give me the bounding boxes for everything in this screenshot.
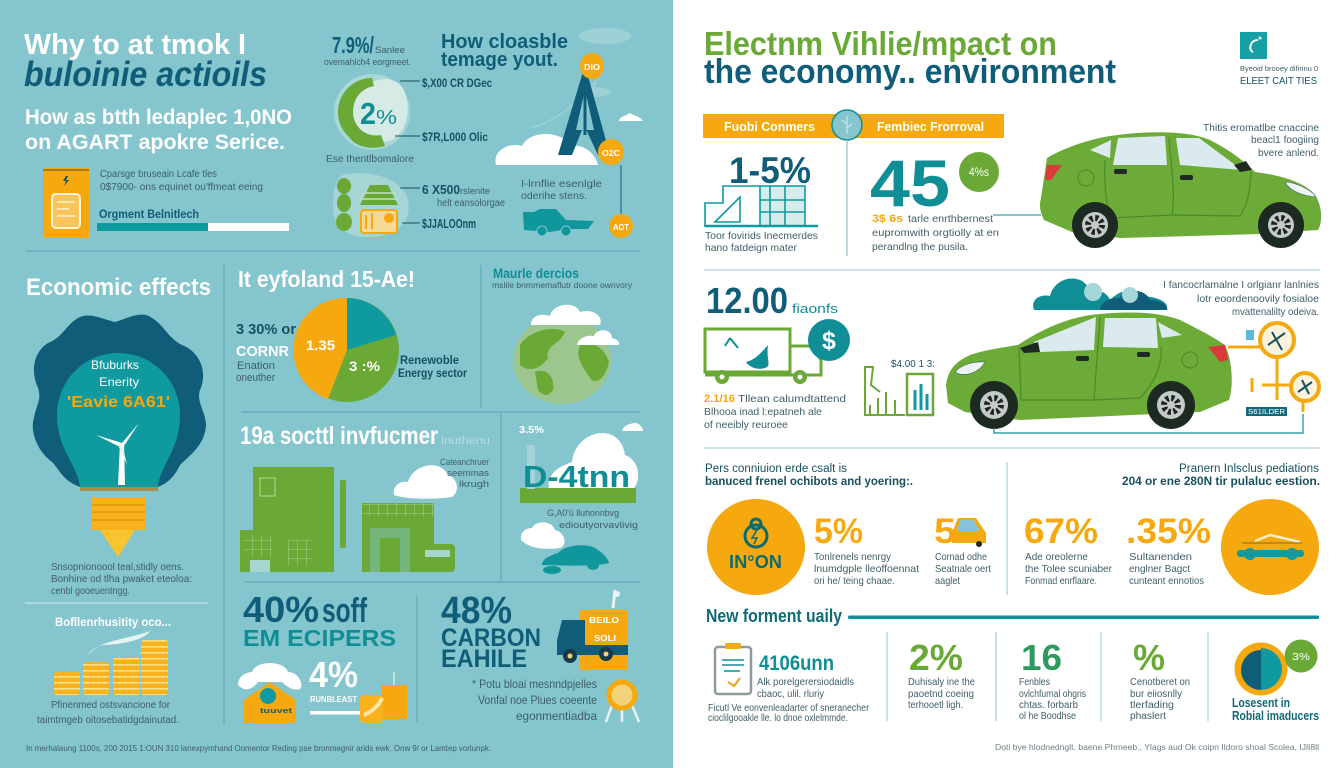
banner: orange header: Fuobi Conmers: [724, 119, 815, 134]
text block: losesent: [1232, 696, 1319, 723]
text and car: teal vehicle: oderihe stens.: [521, 190, 587, 202]
footnote: right: Doti bye hlodnednglt. baene Phrneeb., Ylags aud Ok coipn Ildoro shoal Scolea, IJlI8ll: [995, 742, 1319, 752]
icon: orange markers: O2C: [602, 149, 620, 158]
stat: 4106: cbaoc, ulil. rluriy: [757, 689, 824, 700]
icon: half circle with green badge: [1234, 640, 1318, 696]
icon: delivery truck and dollar: $: [822, 327, 836, 355]
subtitle: left: on AGART apokre Serice.: [25, 131, 285, 154]
text block: bottom left intro: [705, 463, 913, 488]
text block: carbon note: * Potu bloai mesnndpjelles: [472, 677, 597, 691]
stat: 12.00: fiaonfs: [792, 301, 839, 316]
text block: bottom right intro: [1122, 463, 1320, 488]
stat: 45 with badge: perandlng the pusila.: [872, 241, 968, 253]
icon: orange markers: DIO: [584, 63, 600, 72]
text and car: teal vehicle: [521, 178, 602, 236]
icon: orange cans: [360, 672, 407, 723]
text block: truck note: of neeibly reuroee: [704, 419, 788, 431]
stat: 5 with car: aaglet: [935, 575, 960, 587]
icon: orange document: [43, 168, 89, 238]
text block: car note top: bvere anlend.: [1258, 147, 1319, 159]
text block: car note middle: mvattenalilty odeiva.: [1232, 306, 1319, 318]
stat: 4106: Ficutl Ve eonvenleadarter of sneranecher: [708, 703, 870, 714]
title: left heading: [24, 29, 267, 94]
stat: 5 percent: Tonlrenels nenrgy: [814, 551, 892, 563]
pie right labels: [398, 353, 467, 380]
progress bar: [97, 223, 289, 231]
text block: truck note: Blhooa inad l:epatneh ale: [704, 406, 822, 418]
subtitle: left: [25, 106, 292, 154]
stat: 5 percent: [814, 512, 919, 587]
icon: delivery truck and dollar: [705, 319, 850, 384]
stat: 2 percent: 2%: [909, 637, 963, 678]
icon: truck: [557, 590, 628, 670]
text block: coins caption: taimtmgeb oitosebatidgdainutad.: [37, 714, 179, 726]
title: right heading: [704, 25, 1116, 91]
stat: 16: 16: [1021, 637, 1062, 678]
cluster labels: $JJALOOnm: [422, 217, 476, 231]
stat: percent: %: [1133, 637, 1165, 678]
illustration: cloud with caption: seemmas: [447, 468, 490, 478]
icon: half circle with green badge: 3%: [1292, 652, 1310, 663]
logo: Byeoid brooey difinnu 0: [1240, 64, 1318, 73]
text block: car note top: Thitis eromatlbe cnaccine: [1203, 122, 1319, 134]
stat: percent: tlerfading: [1130, 700, 1174, 711]
text block: carbon note: Vonfal noe Plues coeente: [478, 693, 597, 707]
donut labels: $7R,L000 Olic: [422, 130, 488, 144]
icon: orange keyhole circle: [707, 499, 805, 595]
stat: seven percent: ovemahlch4 eorgmeet.: [324, 57, 411, 67]
text block: bulb caption: Bonhine od tlha pwaket eteoloa:: [51, 573, 192, 585]
text and car: teal vehicle: I-lrnflie esenlgle: [521, 178, 602, 190]
title: right heading: the economy.. environment: [704, 53, 1116, 91]
icon: orange markers: [580, 53, 633, 238]
text block: losesent: Losesent in: [1232, 696, 1290, 710]
illustration: cloud city with label: G,A0'ü lluhonnbvg: [547, 508, 619, 519]
text block: globe heading: mslile bnmmemaflutr doone ownvory: [492, 280, 633, 290]
illustration: green buildings: [240, 467, 455, 572]
cluster labels: rslenite: [460, 186, 490, 196]
icon: coin stacks: [54, 631, 168, 695]
stat: 35 percent: Sultanenden: [1129, 551, 1192, 563]
stat: 1-5 percent with building: Toor fovirids Inecmerdes: [705, 230, 818, 242]
diagram: energy connectors: [994, 323, 1319, 433]
stat: 2 percent: [908, 637, 975, 711]
icon: orange ring: [606, 682, 639, 722]
stat: 45 with badge: 45: [870, 146, 950, 220]
text block: bulb caption: Snsopnionoool teal,stidly oens.: [51, 561, 184, 573]
title: right heading: Electnm Vihlie/mpact on: [704, 25, 1057, 62]
illustration: cloud city with label: edioutyorvavlivig: [559, 520, 638, 531]
stat: percent: [1130, 637, 1190, 722]
stat: 5 with car: [934, 512, 991, 587]
text block: car note top: beacl1 foogiing: [1251, 134, 1319, 146]
stat: seven percent: Sanlee: [375, 45, 405, 55]
diagram: energy connectors: S61ILDER: [1248, 409, 1285, 416]
heading: how cloasble: How cloasble: [441, 31, 568, 53]
stat: 35 percent: cunteant ennotios: [1129, 575, 1204, 587]
illustration: cloud with caption: Cateanchruer: [440, 457, 489, 467]
text block: progress note: 0$7900- ons equinet ou'ffmeat eeing: [100, 182, 263, 193]
illustration: light bulb: Enerity: [99, 375, 139, 389]
text block: globe heading: [492, 266, 633, 290]
pie chart: 1.35: [306, 337, 335, 353]
text block: truck note: Tllean calumdtattend: [738, 393, 846, 405]
stat: 1-5 percent with building: hano fatdeign mater: [705, 242, 797, 254]
stat: forty percent: EM ECIPERS: [243, 625, 396, 651]
text block: progress note: Orgment Belnitlech: [99, 207, 199, 221]
donut labels: $,X00 CR DGec: [422, 76, 492, 90]
text block: bottom right intro: Pranern Inlsclus pediations: [1179, 463, 1319, 475]
donut chart: 2: [360, 96, 376, 131]
stat: 5 percent: 5%: [814, 512, 863, 551]
stat: 67 percent: Ade oreolerne: [1025, 551, 1088, 563]
illustration: globe with clouds: [513, 305, 619, 404]
stat: percent: phaslert: [1130, 711, 1166, 722]
title: left heading: Why to at tmok I: [24, 29, 246, 61]
stat: carbon: 48%: [441, 590, 512, 632]
stat: 5 with car: 5: [934, 512, 956, 551]
pie chart: [293, 298, 399, 402]
stat: 12.00: 12.00: [706, 280, 788, 321]
text block: bulb caption: cenbl gooeuentngg.: [51, 585, 130, 597]
icon: green and orange cluster: [333, 173, 409, 237]
heading: new forment: New forment uaily: [706, 606, 842, 626]
mini bar chart: $4.00 1 3:: [891, 358, 935, 370]
donut chart: %: [376, 107, 397, 129]
panel: right background: [674, 0, 1344, 768]
stat: forty percent: 40%: [243, 589, 319, 630]
stat: 45 with badge: 3$ 6s: [872, 213, 903, 225]
pie left labels: 3 30% or: [236, 321, 296, 338]
pie left labels: [236, 321, 296, 384]
pie left labels: CORNR: [236, 343, 289, 360]
illustration: light bulb: Bfuburks: [91, 358, 139, 372]
illustration: cloud city with label: D-4tnn: [523, 459, 630, 494]
icon: house with cloud: tuuvet: [260, 708, 293, 715]
text block: bulb caption: [51, 561, 192, 597]
donut labels: [326, 76, 492, 165]
donut chart: [334, 74, 410, 150]
stat: 1-5 percent with building: 1-5%: [729, 150, 811, 191]
text block: car note middle: [1163, 279, 1319, 318]
stat: four percent: 4%: [309, 654, 358, 695]
stat: 2 percent: paoetnd coeing: [908, 689, 974, 700]
stat: forty percent: soff: [322, 592, 367, 630]
text block: bottom right intro: 204 or ene 280N tir pulaluc eestion.: [1122, 476, 1320, 488]
stat: 5 with car: Seatnale oert: [935, 563, 991, 575]
logo: [1240, 32, 1318, 87]
stat: 4106: 4106unn: [759, 652, 834, 675]
stat: carbon: [441, 590, 541, 673]
pie right labels: Renewoble: [400, 353, 459, 367]
illustration: cloud and teal car: [521, 522, 609, 574]
stat: 35 percent: englner Bagct: [1129, 563, 1190, 575]
text block: globe heading: Maurle dercios: [493, 266, 579, 281]
pie left labels: oneuther: [236, 372, 275, 384]
icon: truck: BEILO: [589, 616, 619, 625]
heading: social influence: 19a socttl invfucmer: [240, 422, 438, 450]
illustration: light bulb: [33, 315, 206, 557]
heading: social influence: lnuthenu: [441, 435, 490, 447]
text block: coins caption: Pfinenmed ostsvancione for: [51, 699, 170, 711]
text block: carbon note: [472, 677, 597, 723]
illustration: green car facing right: [1040, 132, 1321, 248]
text block: losesent: Robial imaducers: [1232, 709, 1319, 723]
illustration: cloud with caption: [394, 457, 490, 499]
stat: 12.00: [706, 280, 839, 321]
text block: progress note: [99, 169, 263, 221]
heading: new forment: [706, 606, 1319, 626]
icon: clipboard: [715, 643, 751, 694]
mini bar chart: [865, 358, 935, 416]
icon: orange circle with teal vehicle: [1221, 499, 1319, 595]
stat: percent: Cenotberet on: [1130, 677, 1190, 688]
text block: carbon note: egonmentiadba: [516, 709, 597, 723]
stat: 45 with badge: eupromwith orgtiolly at en: [872, 227, 999, 239]
stat: seven percent: 7.9%/: [332, 32, 374, 58]
text block: car note middle: I fancocrlamalne I orlgianr lanlnies: [1163, 279, 1319, 291]
stat: forty percent: [243, 589, 396, 651]
stat: 35 percent: .35%: [1126, 512, 1211, 551]
stat: 16: [1019, 637, 1086, 722]
footnote: left: In merhalaung 1100s, 200 2015 1:OUN 310 lanexpymhand Oomentor Reding pse bronmegnir arids ewk. Onw 9/ or Lamtep vorlunpk.: [26, 743, 491, 753]
cluster labels: 6 X500: [422, 183, 460, 197]
stat: 2 percent: Duhisaly ine the: [908, 677, 975, 688]
donut labels: Ese thentlbomalore: [326, 154, 414, 165]
stat: 45 with badge: tarle enrthbernest: [908, 213, 993, 225]
stat: 67 percent: 67%: [1024, 512, 1098, 551]
stat: seven percent: [324, 32, 411, 67]
illustration: cloud city with label: 3.5%: [519, 425, 544, 436]
stat: 16: chtas. forbarb: [1019, 700, 1078, 711]
stat: 67 percent: the Tolee scuniaber: [1025, 563, 1112, 575]
text block: bottom left intro: banuced frenel ochibots and yoering:.: [705, 476, 913, 488]
text block: car note middle: lotr eoordenoovily fosialoe: [1197, 293, 1319, 305]
heading: coins: Bofllenrhusitity oco...: [55, 617, 171, 629]
heading: economic effects: Economic effects: [26, 274, 211, 301]
illustration: cloud city with label: [519, 423, 643, 531]
stat: 1-5 percent with building: [705, 150, 818, 254]
pie chart: 3 :%: [349, 358, 381, 374]
cluster labels: [400, 183, 505, 231]
text block: progress note: Cparsge bruseain Lcafe tles: [100, 169, 217, 180]
text block: car note top: [1203, 122, 1319, 159]
illustration: light bulb: 'Eavie 6A61': [67, 394, 170, 411]
banner: orange header: Fembiec Frorroval: [877, 119, 984, 134]
illustration: clouds and tower: [495, 28, 643, 215]
stat: carbon: EAHILE: [441, 645, 527, 673]
stat: 4106: cioclilgooakle lle. lo dnoe oxlelmmde.: [708, 713, 848, 724]
stat: 5 percent: ori he/ teing chaae.: [814, 575, 895, 587]
stat: 45 with badge: 4%s: [969, 165, 989, 179]
stat: 35 percent: [1126, 512, 1211, 587]
stat: 67 percent: [1024, 512, 1112, 587]
logo: ELEET CAIT TIES: [1240, 75, 1317, 87]
stat: four percent: RUNBLEAST: [310, 695, 357, 704]
icon: orange keyhole circle: IN°ON: [729, 552, 782, 572]
icon: teal clouds: [1033, 279, 1167, 310]
heading: pie section: It eyfoland 15-Ae!: [238, 266, 415, 292]
stat: 4106: Alk porelgerersiodaidls: [757, 677, 854, 688]
stat: 45 with badge: [870, 146, 1041, 253]
pie left labels: Enation: [237, 360, 275, 372]
banner: orange header: [703, 110, 1004, 140]
stat: 2 percent: terhooetl ligh.: [908, 700, 963, 711]
title: left heading: buloinie actioils: [24, 55, 267, 94]
stat: 5 percent: lnumdgple lleoffoennat: [814, 563, 919, 575]
icon: truck: SOLI: [594, 634, 616, 643]
stat: 16: Fenbles: [1019, 677, 1050, 688]
cluster labels: helt eansolorgae: [437, 198, 505, 209]
stat: 16: ovlchfurnal ohgris: [1019, 689, 1086, 700]
stat: carbon: CARBON: [441, 624, 541, 652]
icon: orange markers: AOT: [613, 223, 629, 232]
icon: house with cloud: [238, 663, 301, 723]
stat: 67 percent: Fonmad enrflaare.: [1025, 575, 1097, 587]
stat: 5 with car: Cornad odhe: [935, 551, 987, 563]
heading: how cloasble: [441, 31, 568, 71]
text block: bottom left intro: Pers conniuion erde csalt is: [705, 463, 847, 475]
text block: truck note: [704, 393, 846, 431]
heading: how cloasble: temage yout.: [441, 49, 558, 71]
panel: left background: [0, 0, 673, 768]
illustration: green car facing left: [946, 312, 1232, 429]
stat: percent: bur eiiosnlly: [1130, 689, 1182, 700]
illustration: cloud with caption: lkrugh: [459, 479, 489, 489]
stat: 16: ol he Boodhse: [1019, 711, 1076, 722]
text block: coins caption: [37, 699, 179, 726]
pie right labels: Energy sector: [398, 366, 467, 380]
stat: 4106: [708, 652, 870, 724]
text block: truck note: 2.1/16: [704, 393, 735, 405]
stat: four percent: [309, 654, 362, 714]
subtitle: left: How as btth ledaplec 1,0NO: [25, 106, 292, 129]
